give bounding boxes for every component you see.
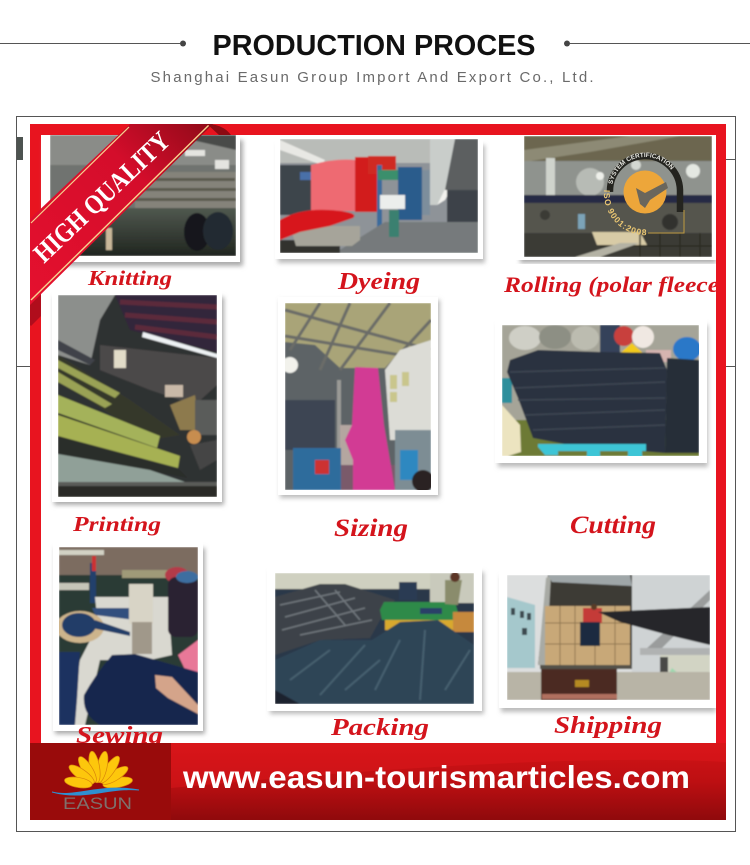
certification stamp — [604, 152, 684, 236]
photo card: knitting — [41, 135, 243, 266]
label: packing: Packing — [330, 715, 429, 741]
outer frame — [16, 116, 736, 832]
title: PRODUCTION PROCES — [212, 30, 536, 62]
ribbon: high quality: HIGH QUALITY — [27, 125, 176, 268]
logo: easun sun — [52, 750, 139, 813]
title rule: left — [0, 40, 186, 46]
red border panel — [30, 124, 726, 820]
label: sewing: Sewing — [76, 723, 163, 749]
red border right edge over cards — [716, 135, 726, 743]
photo card: printing — [52, 291, 224, 505]
photo card: dyeing — [275, 135, 485, 263]
subtitle: Shanghai Easun Group Import And Export Co., Ltd. — [150, 69, 594, 86]
label: sizing: Sizing — [334, 515, 408, 542]
label: shipping: Shipping — [554, 713, 662, 739]
title rule: right — [564, 40, 750, 46]
photo card: cutting — [495, 319, 708, 467]
certification stamp: SYSTEM CERTIFICATION — [608, 152, 674, 184]
label: knitting: Knitting — [87, 266, 172, 290]
label: printing: Printing — [72, 512, 161, 536]
label: rolling: Rolling (polar fleece — [503, 272, 719, 297]
bottom banner — [30, 743, 726, 820]
label: cutting: Cutting — [570, 512, 656, 539]
photo card: sewing — [53, 541, 205, 734]
background fragments behind the frame — [17, 137, 735, 367]
website url: www.easun-tourismarticles.com — [182, 759, 690, 795]
ribbon: high quality — [27, 124, 231, 326]
photo card: rolling — [515, 135, 716, 263]
logo: easun sun: EASUN — [63, 794, 132, 813]
photo card: packing — [267, 566, 484, 714]
photo card: sizing — [278, 297, 440, 498]
certification stamp: ISO 9001:2008 — [604, 190, 646, 236]
label: dyeing: Dyeing — [337, 269, 420, 295]
photo card: shipping — [499, 569, 716, 712]
